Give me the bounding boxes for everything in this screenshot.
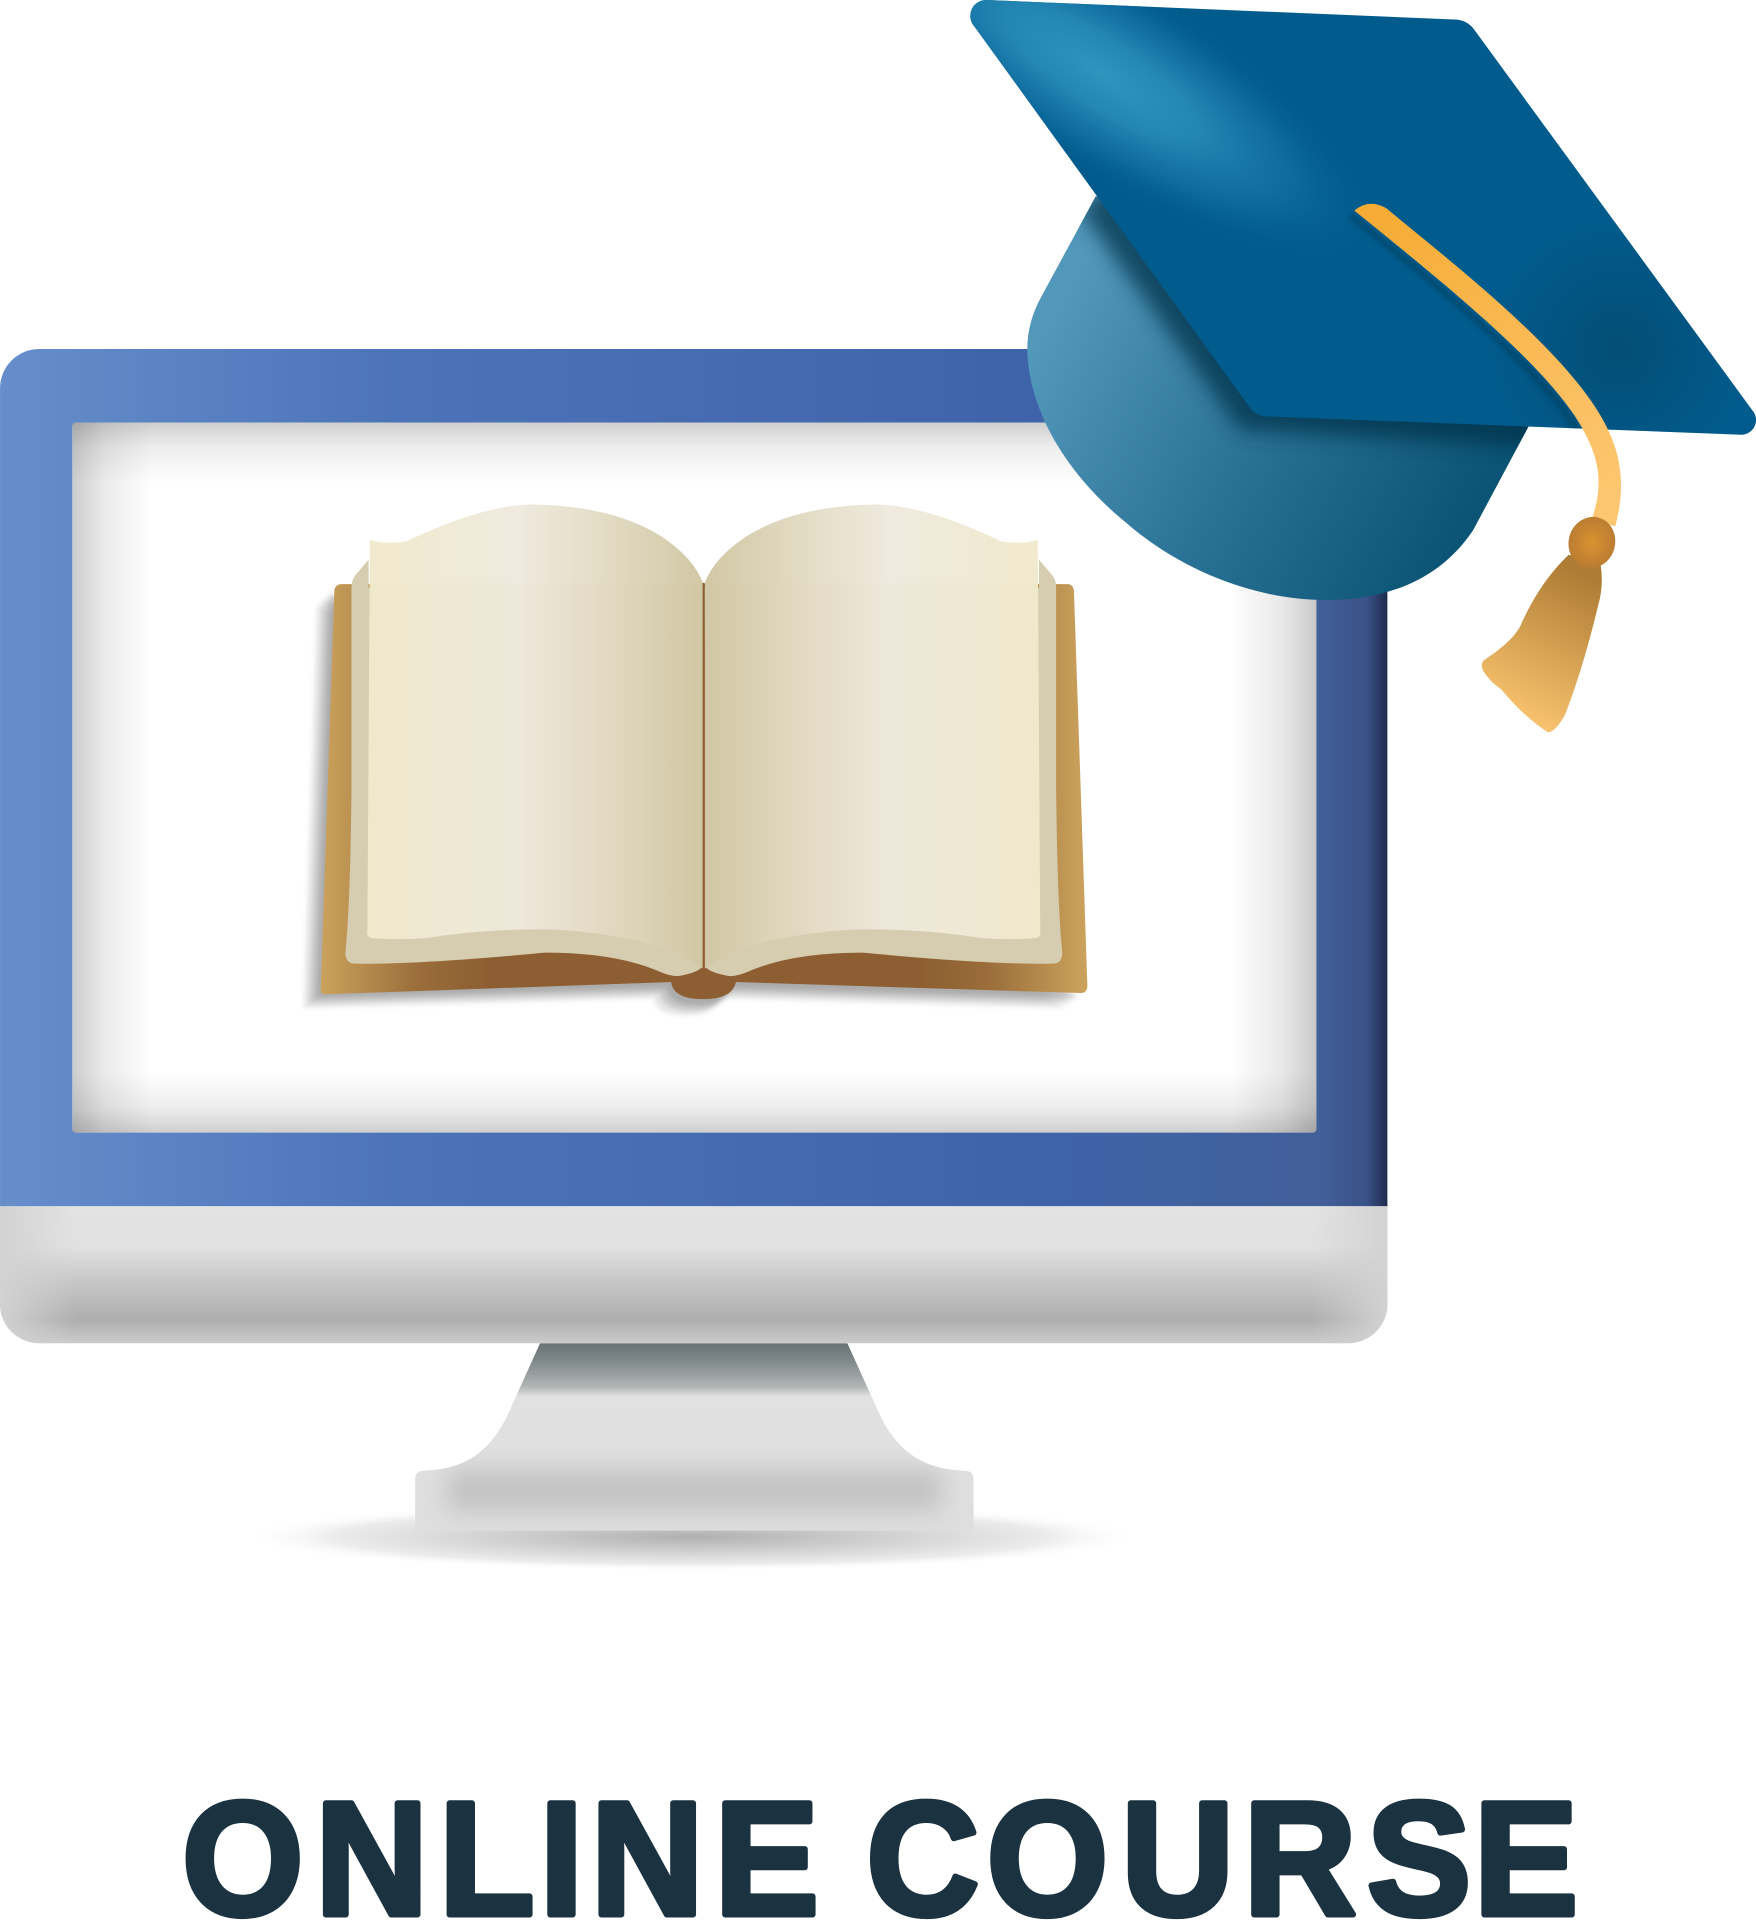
icon: desktop monitor [0, 349, 1387, 1571]
monitor chin [0, 1206, 1387, 1343]
icon: graduation cap [955, 0, 1756, 732]
book shadow [304, 594, 1079, 1015]
book spine line [703, 583, 705, 970]
tassel cord [1351, 204, 1621, 527]
right page block [705, 560, 1062, 976]
monitor stand [415, 1343, 974, 1531]
right page [697, 496, 1046, 981]
monitor stand shadow [244, 1502, 1140, 1571]
left page [361, 496, 710, 981]
icon: open book [304, 496, 1087, 1015]
cap board [955, 0, 1756, 453]
cap skull [1027, 196, 1543, 600]
monitor blue frame [0, 349, 1387, 1206]
book cover [321, 584, 1087, 999]
tassel fringe [1482, 555, 1602, 732]
monitor screen [72, 422, 1316, 1133]
tassel knot [1563, 512, 1621, 573]
left page block [345, 560, 703, 976]
